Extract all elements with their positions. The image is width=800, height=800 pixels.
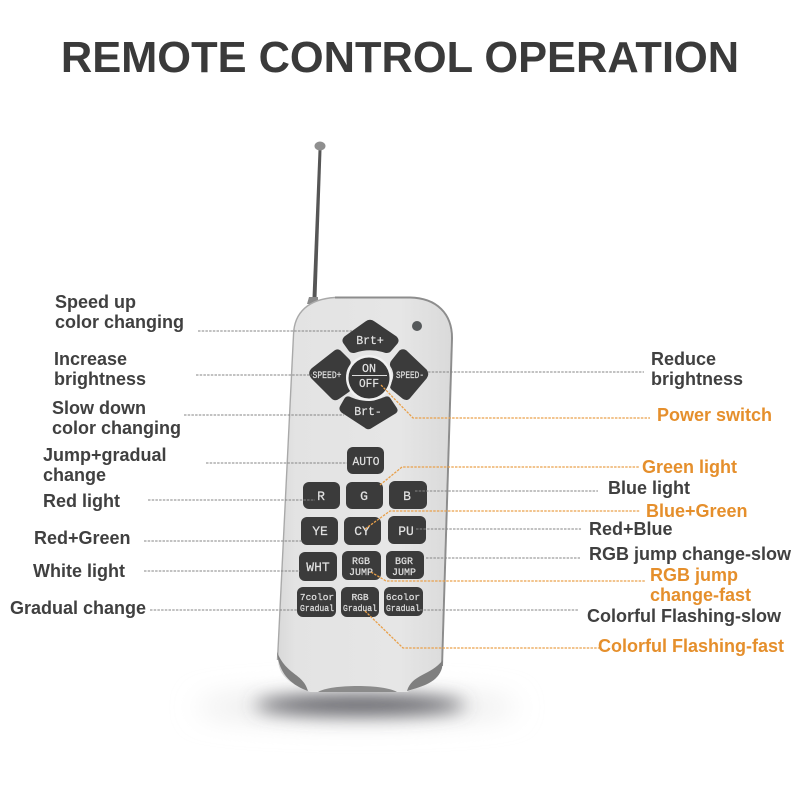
button grid: WHT — [306, 560, 330, 575]
right labels: Blue light — [608, 478, 690, 498]
button grid — [297, 481, 427, 617]
antenna — [307, 142, 326, 304]
button grid: Gradual — [343, 603, 377, 614]
button grid: B — [403, 489, 411, 504]
left labels: White light — [33, 561, 125, 581]
button grid: RGB — [352, 557, 370, 568]
right labels: brightness — [651, 369, 743, 389]
button grid: YE — [312, 524, 328, 539]
button grid: PU — [398, 524, 414, 539]
button grid: BGR — [395, 557, 413, 568]
button: Brt+: Brt+ — [356, 335, 384, 348]
button: ON/OFF: OFF — [359, 378, 379, 391]
title: REMOTE CONTROL OPERATION — [61, 34, 739, 82]
button: SPEED-: SPEED- — [396, 370, 424, 382]
button grid: JUMP — [349, 568, 373, 579]
button grid: Gradual — [300, 603, 334, 614]
button: SPEED- — [391, 350, 428, 399]
left labels: Increase — [54, 349, 127, 369]
button grid: G — [360, 489, 368, 504]
remote shadow — [197, 694, 517, 720]
left labels: color changing — [55, 312, 184, 332]
left labels: Speed up — [55, 292, 136, 312]
button grid: Gradual — [386, 603, 420, 614]
button grid: CY — [354, 524, 370, 539]
button grid: R — [317, 489, 325, 504]
button: Brt- — [340, 397, 397, 428]
orange leader lines — [365, 385, 650, 648]
left labels — [10, 292, 184, 618]
left labels: Jump+gradual — [43, 445, 167, 465]
right labels — [587, 349, 792, 656]
button grid: RGB — [351, 592, 369, 603]
left labels: brightness — [54, 369, 146, 389]
button: SPEED+: SPEED+ — [312, 370, 342, 382]
button: ON/OFF — [346, 355, 392, 401]
right labels: change-fast — [650, 585, 751, 605]
right labels: Red+Blue — [589, 519, 673, 539]
right labels: Power switch — [657, 405, 772, 425]
button grid: JUMP — [392, 568, 416, 579]
right labels: RGB jump — [650, 565, 738, 585]
right labels: RGB jump change-slow — [589, 544, 792, 564]
right labels: Blue+Green — [646, 501, 748, 521]
right labels: Colorful Flashing-slow — [587, 606, 782, 626]
remote body — [277, 298, 452, 692]
button: AUTO: AUTO — [352, 455, 380, 469]
right labels: Reduce — [651, 349, 716, 369]
left labels: change — [43, 465, 106, 485]
right labels: Colorful Flashing-fast — [598, 636, 784, 656]
gray leader lines — [144, 331, 644, 610]
button: SPEED+ — [310, 350, 350, 400]
left labels: Gradual change — [10, 598, 146, 618]
button grid: 7color — [300, 592, 334, 603]
right labels: Green light — [642, 457, 737, 477]
left labels: Slow down — [52, 398, 146, 418]
left labels: Red light — [43, 491, 120, 511]
button grid: 6color — [386, 592, 420, 603]
left labels: color changing — [52, 418, 181, 438]
button: AUTO — [347, 447, 384, 474]
left labels: Red+Green — [34, 528, 131, 548]
button: ON/OFF: ON — [362, 363, 376, 376]
button: Brt+ — [343, 320, 398, 352]
button: Brt-: Brt- — [354, 406, 382, 419]
